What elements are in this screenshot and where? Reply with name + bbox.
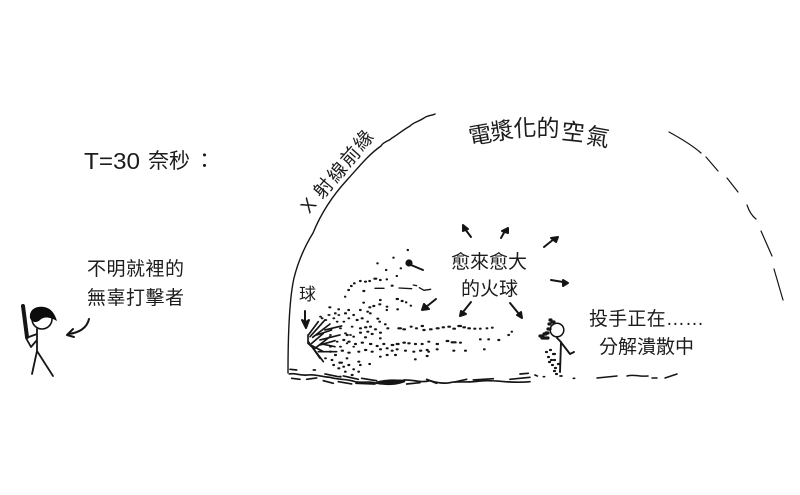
- lower stream: [330, 348, 485, 359]
- arrows: expanding fireball: [406, 225, 568, 318]
- arrow: to batter: [67, 319, 89, 337]
- label: pitcher disintegrating: [589, 308, 704, 358]
- label: growing fireball: 的火球: [461, 278, 518, 300]
- label: pitcher disintegrating: 分解潰散中: [599, 336, 694, 358]
- figure: batter: [23, 306, 57, 376]
- label: unwitting batter: 不明就裡的: [87, 258, 184, 280]
- label: plasma air: 的: [536, 115, 560, 141]
- arc: X-ray front (dashed right): [669, 132, 783, 300]
- ground dashes: [597, 374, 677, 378]
- arrow: to ball: [302, 311, 309, 328]
- label: plasma air: 空: [560, 118, 586, 146]
- label: unwitting batter: [87, 258, 184, 309]
- label: X-ray front: 緣: [349, 126, 378, 155]
- label: plasma air: 化: [513, 114, 537, 142]
- title: T=30 nanoseconds: [84, 148, 215, 174]
- title: T=30 nanoseconds: T=30: [84, 148, 140, 174]
- label: X-ray front: 前: [336, 142, 365, 171]
- label: plasma air: [466, 114, 612, 152]
- label: growing fireball: [451, 251, 527, 300]
- ball front: [308, 320, 342, 362]
- figure: disintegrating pitcher: [540, 320, 574, 374]
- title: T=30 nanoseconds: ：: [194, 150, 215, 173]
- label: X-ray front: X: [297, 194, 321, 218]
- label: ball: 球: [299, 285, 316, 304]
- upper plume: [345, 250, 411, 306]
- arc: X-ray front (solid left): [288, 114, 435, 373]
- label: growing fireball: 愈來愈大: [451, 251, 527, 273]
- fireball debris: [308, 250, 512, 377]
- ground: [289, 369, 575, 384]
- upper stream: [360, 324, 512, 335]
- title: T=30 nanoseconds: 奈秒: [148, 150, 190, 173]
- label: plasma air: 電: [466, 120, 494, 150]
- label: plasma air: 漿: [489, 117, 515, 145]
- label: plasma air: 氣: [584, 122, 612, 152]
- label: pitcher disintegrating: 投手正在……: [589, 308, 704, 330]
- label: unwitting batter: 無辜打擊者: [87, 287, 184, 309]
- label: X-ray front: 線: [323, 158, 352, 187]
- middle stream: [343, 335, 499, 346]
- label: X-ray front: [297, 126, 378, 218]
- label: X-ray front: 射: [309, 174, 338, 203]
